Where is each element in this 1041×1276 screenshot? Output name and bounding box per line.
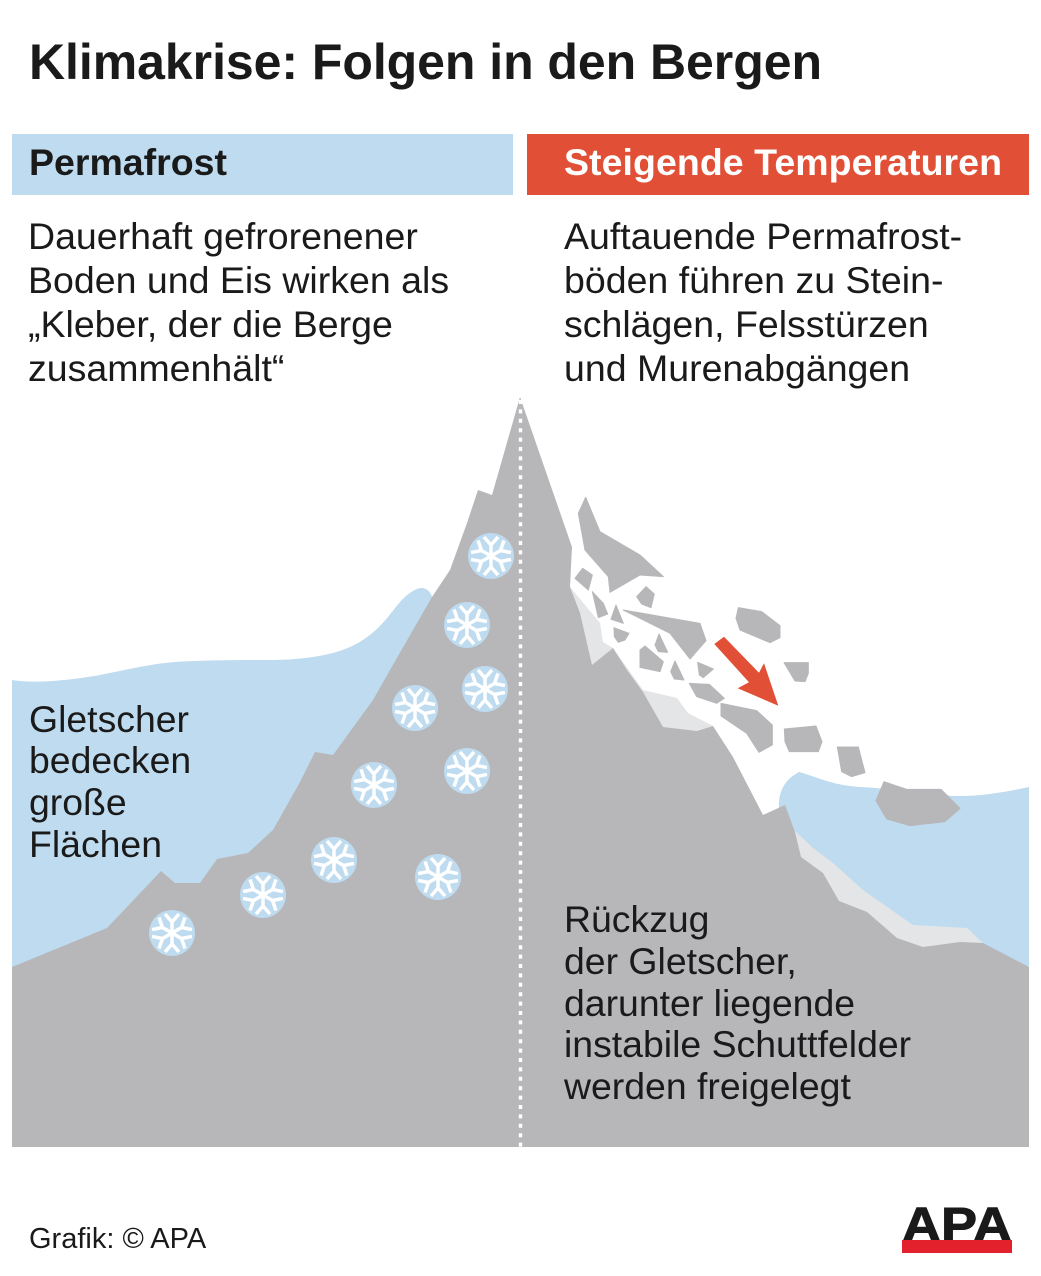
mountain (12, 397, 1029, 1147)
text block: glacier retreat: werden freigelegt (563, 1065, 851, 1107)
text block: thawing description: Auftauende Permafrost- (564, 215, 962, 257)
panel header: Steigende Temperaturen: Steigende Temperaturen (564, 141, 1002, 183)
snowflake icons (149, 533, 514, 956)
glacier right (779, 772, 1029, 970)
text block: Permafrost description: Dauerhaft gefrorenener (28, 215, 418, 257)
text block: thawing description: schlägen, Felsstürzen (564, 303, 929, 345)
dotted centre line (519, 400, 522, 1147)
text block: glaciers cover: Gletscher (29, 698, 189, 740)
falling rocks (575, 497, 960, 826)
text block: Permafrost description: Boden und Eis wirken als (28, 259, 449, 301)
text block: glacier retreat: der Gletscher, (564, 940, 797, 982)
logo: APA: APA (902, 1199, 1012, 1252)
text block: glacier retreat: instabile Schuttfelder (564, 1023, 911, 1065)
title: Klimakrise: Folgen in den Bergen (29, 34, 822, 90)
glacier left (12, 588, 432, 968)
text block: Permafrost description: „Kleber, der die Berge (28, 303, 393, 345)
panel header: Steigende Temperaturen (527, 134, 1029, 195)
text block: glaciers cover: bedecken (29, 739, 191, 781)
exposed debris field (right, upper) (570, 587, 713, 731)
text block: glaciers cover (29, 698, 191, 865)
text block: thawing description (564, 215, 962, 389)
exposed debris field (right, lower) (794, 830, 985, 950)
source credit: Grafik: © APA (29, 1223, 207, 1255)
panel header: Permafrost (12, 134, 513, 195)
text block: Permafrost description (28, 215, 449, 389)
text block: glaciers cover: große (29, 781, 127, 823)
text block: glaciers cover: Flächen (29, 823, 162, 865)
arrow: rockfall direction (714, 637, 778, 706)
text block: glacier retreat (563, 898, 911, 1107)
text block: thawing description: und Murenabgängen (564, 347, 910, 389)
text block: Permafrost description: zusammenhält“ (28, 347, 284, 389)
text block: glacier retreat: Rückzug (564, 898, 709, 940)
text block: thawing description: böden führen zu Stein- (564, 259, 943, 301)
panel header: Permafrost: Permafrost (29, 141, 228, 183)
text block: glacier retreat: darunter liegende (564, 982, 855, 1024)
